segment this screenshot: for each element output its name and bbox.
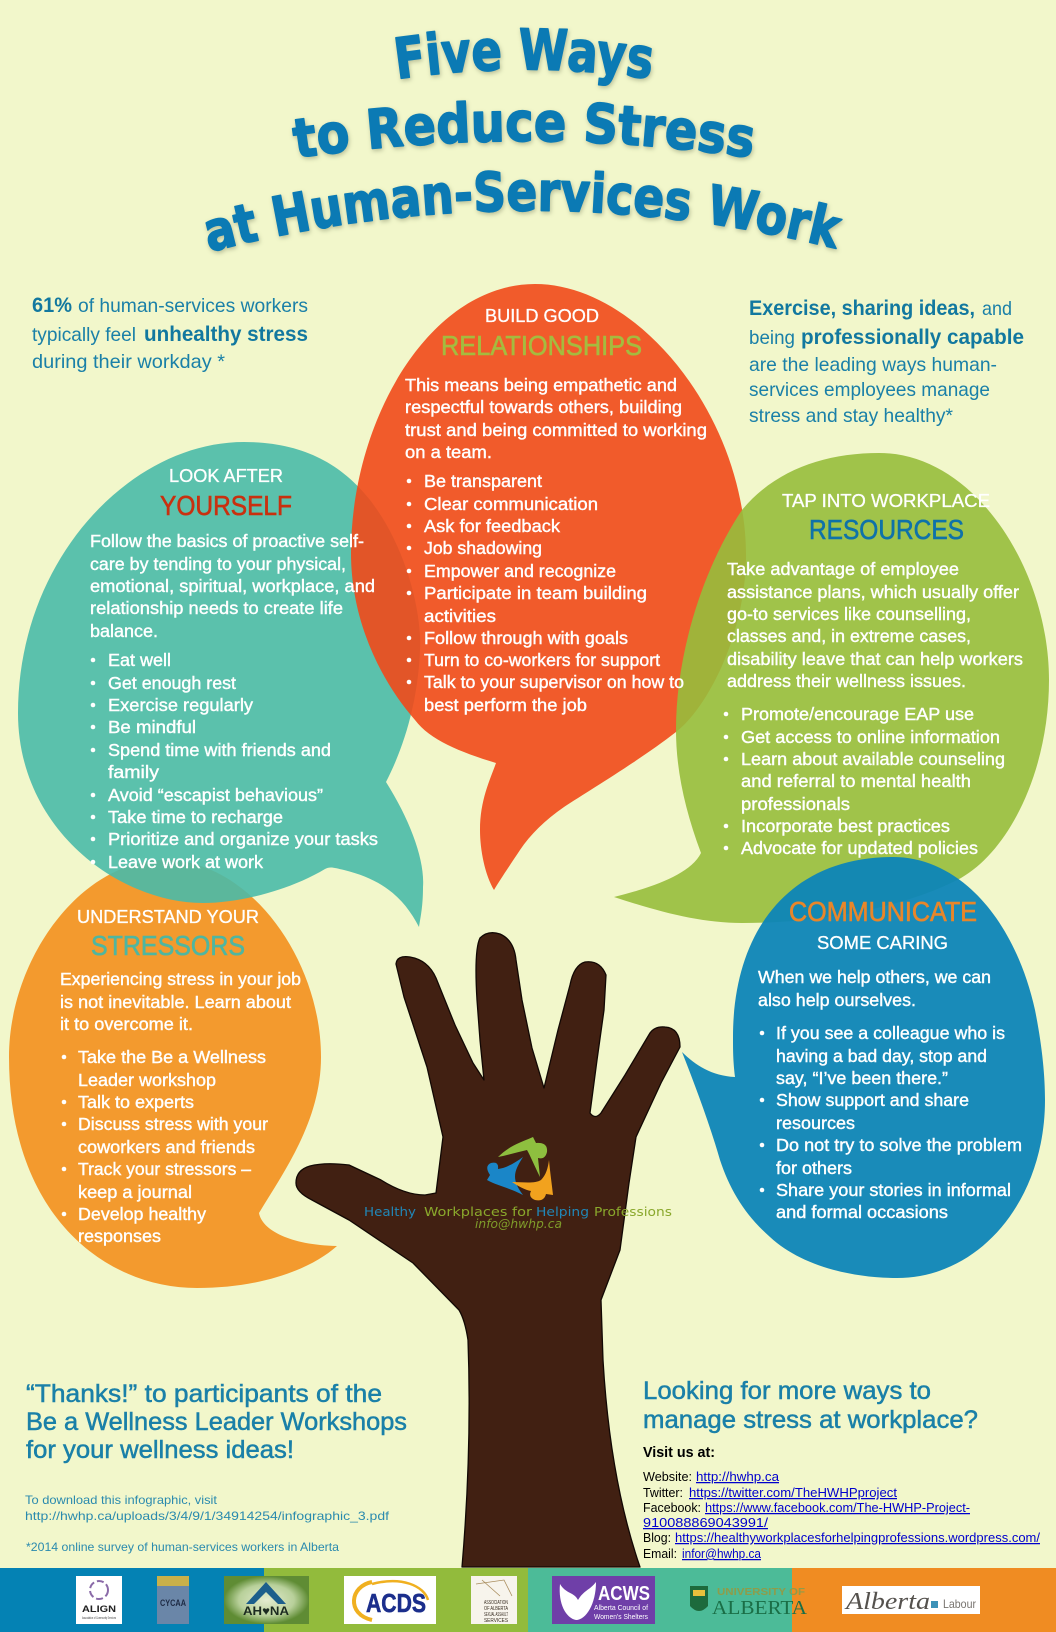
icon: raised hand [296, 933, 680, 1567]
panel text: build good relationships: Ask for feedback [424, 516, 560, 536]
logo: AHNA: AH♥NA [243, 1604, 289, 1618]
stat: leading ways to manage stress [749, 297, 1024, 427]
panel text: build good relationships: Empower and recognize [424, 561, 616, 581]
panel text: understand your stressors: UNDERSTAND YOUR [77, 906, 259, 927]
panel text: communicate some caring: and formal occasions [776, 1202, 948, 1222]
panel text: tap into workplace resources: assistance plans, which usually offer [727, 582, 1019, 602]
logo: association of Alberta sexual assault services [471, 1576, 517, 1624]
panel text: understand your stressors: Track your stressors – [78, 1159, 251, 1179]
panel text: look after yourself [90, 465, 378, 872]
contact links [643, 1444, 1041, 1561]
panel text: tap into workplace resources: Learn about available counseling [741, 749, 1005, 769]
panel text: tap into workplace resources: go-to services like counselling, [727, 604, 971, 624]
thanks message [26, 1380, 407, 1464]
panel text: tap into workplace resources: address their wellness issues. [727, 671, 966, 691]
logo: ACDS: ACDS [366, 1588, 426, 1618]
stat: leading ways to manage stress: and [982, 298, 1012, 320]
panel text: communicate some caring: If you see a colleague who is [776, 1023, 1005, 1043]
panel text: look after yourself: care by tending to your physical, [90, 554, 346, 574]
panel text: communicate some caring: Share your stories in informal [776, 1180, 1011, 1200]
logo: ACWS: ACWS [598, 1583, 650, 1605]
logo: ALIGN: Association of Community Services [82, 1615, 116, 1620]
panel text: build good relationships: BUILD GOOD [485, 305, 599, 326]
bubble: understand your stressors (orange) [9, 860, 337, 1288]
stat: leading ways to manage stress: services employees manage [749, 379, 990, 401]
panel text: build good relationships: Be transparent [424, 471, 542, 491]
title: Five Ways [394, 28, 655, 90]
panel text: build good relationships: Turn to co-workers for support [424, 650, 660, 670]
logo: association of Alberta sexual assault services: SERVICES [484, 1618, 509, 1624]
contact links: Facebook: [643, 1501, 701, 1515]
bubble: build good relationships (red) [351, 284, 746, 890]
logo text: Healthy Workplaces for Helping Professions: info@hwhp.ca [475, 1216, 562, 1231]
panel text: build good relationships [405, 305, 707, 715]
contact links: Visit us at: [643, 1444, 715, 1461]
download note [25, 1493, 390, 1523]
panel text: look after yourself: Exercise regularly [108, 695, 253, 715]
panel text: communicate some caring: Do not try to solve the problem [776, 1135, 1022, 1155]
panel text: understand your stressors: it to overcome it. [60, 1014, 193, 1034]
more ways heading [643, 1377, 978, 1434]
panel text: communicate some caring: say, “I’ve been there.” [776, 1068, 948, 1088]
logo: ACWS [552, 1576, 655, 1624]
logo: association of Alberta sexual assault services: ASSOCIATION [484, 1600, 508, 1606]
logo: ALIGN [76, 1576, 122, 1624]
contact links: https://twitter.com/TheHWHPproject [689, 1486, 898, 1500]
logo: Alberta Labour: Labour [943, 1597, 976, 1611]
panel text: build good relationships: Talk to your supervisor on how to [424, 672, 684, 692]
logo: ACWS: Alberta Council of [594, 1603, 649, 1612]
panel text: look after yourself: YOURSELF [160, 490, 292, 521]
logo text: Healthy Workplaces for Helping Professions: Professions [594, 1204, 672, 1219]
logo: University of Alberta: UNIVERSITY OF [717, 1587, 805, 1598]
logo text: Healthy Workplaces for Helping Professions: Healthy [364, 1204, 417, 1219]
logo: ACDS [344, 1576, 436, 1624]
contact links: http://hwhp.ca [696, 1470, 779, 1484]
panel text: understand your stressors: responses [78, 1226, 161, 1246]
stat: leading ways to manage stress: professionally capable [801, 326, 1024, 349]
stat: 61 percent: 61% [32, 294, 72, 317]
more ways heading: manage stress at workplace? [643, 1406, 978, 1434]
panel text: look after yourself: Follow the basics of proactive self- [90, 531, 364, 551]
stat: leading ways to manage stress: are the leading ways human- [749, 354, 997, 376]
panel text: understand your stressors: Experiencing stress in your job [60, 969, 301, 989]
panel text: understand your stressors [60, 906, 301, 1246]
panel text: look after yourself: Spend time with friends and [108, 740, 331, 760]
panel text: communicate some caring: SOME CARING [817, 932, 948, 953]
stat: 61 percent: during their workday * [32, 351, 225, 373]
panel text: tap into workplace resources: Promote/encourage EAP use [741, 704, 974, 724]
logo: association of Alberta sexual assault services: SEXUAL ASSAULT [484, 1612, 508, 1618]
panel text: understand your stressors: Develop healthy [78, 1204, 206, 1224]
panel text: look after yourself: Prioritize and organize your tasks [108, 829, 378, 849]
stat: 61 percent: typically feel [32, 324, 136, 346]
footer colour bar [0, 1568, 1056, 1632]
logo text: Healthy Workplaces for Helping Professions: Workplaces for [424, 1204, 533, 1219]
contact links: Website: [643, 1470, 692, 1484]
logo: CYCAA [157, 1576, 189, 1624]
title [204, 28, 844, 255]
contact links: infor@hwhp.ca [682, 1547, 761, 1561]
stat: 61 percent: of human-services workers [78, 295, 308, 317]
logo: CYCAA: CYCAA [160, 1598, 186, 1608]
contact links: https://www.facebook.com/The-HWHP-Project- [705, 1501, 970, 1515]
thanks message: “Thanks!” to participants of the [26, 1380, 382, 1408]
panel text: build good relationships: activities [424, 606, 496, 626]
panel text: understand your stressors: Leader workshop [78, 1070, 216, 1090]
contact links: 910088869043991/ [643, 1516, 769, 1530]
panel text: build good relationships: Follow through with goals [424, 628, 628, 648]
panel text: communicate some caring: When we help others, we can [758, 967, 991, 987]
stat: 61 percent [32, 294, 308, 373]
panel text: communicate some caring: resources [776, 1113, 855, 1133]
panel text: look after yourself: Get enough rest [108, 673, 236, 693]
panel text: tap into workplace resources: Get access to online information [741, 727, 1000, 747]
panel text: tap into workplace resources: disability leave that can help workers [727, 649, 1023, 669]
logo: ALIGN: ALIGN [82, 1604, 116, 1614]
panel text: look after yourself: Avoid “escapist behavious” [108, 785, 323, 805]
logo: University of Alberta: ALBERTA [712, 1597, 808, 1619]
panel text: build good relationships: RELATIONSHIPS [441, 330, 642, 361]
survey footnote: *2014 online survey of human-services workers in Alberta [26, 1540, 339, 1554]
logo: Alberta Labour [842, 1586, 980, 1615]
bubble: communicate some caring (blue) [682, 857, 1045, 1278]
panel text: understand your stressors: Take the Be a Wellness [78, 1047, 266, 1067]
stat: leading ways to manage stress: being [749, 327, 795, 349]
title: to Reduce Stress [291, 100, 756, 162]
panel text: understand your stressors: Discuss stress with your [78, 1114, 268, 1134]
panel text: build good relationships: Clear communication [424, 494, 598, 514]
panel text: look after yourself: Eat well [108, 650, 171, 670]
panel text: look after yourself: relationship needs to create life [90, 598, 343, 618]
panel text: communicate some caring: COMMUNICATE [789, 896, 977, 927]
panel text: look after yourself: LOOK AFTER [169, 465, 283, 486]
title: at Human-Services Work [204, 170, 844, 255]
bubble: look after yourself (teal) [18, 442, 423, 927]
thanks message: Be a Wellness Leader Workshops [26, 1408, 407, 1436]
panel text: tap into workplace resources: Advocate for updated policies [741, 838, 978, 858]
logo: association of Alberta sexual assault services: OF ALBERTA [484, 1606, 509, 1612]
logo: Alberta Labour: Alberta [844, 1589, 930, 1615]
stat: 61 percent: unhealthy stress [144, 323, 308, 346]
more ways heading: Looking for more ways to [643, 1377, 931, 1405]
download note: To download this infographic, visit [25, 1493, 218, 1507]
panel text: look after yourself: Be mindful [108, 717, 196, 737]
logo text: Healthy Workplaces for Helping Professions: Helping [536, 1204, 589, 1219]
panel text: build good relationships: on a team. [405, 442, 492, 462]
panel text: build good relationships: This means being empathetic and [405, 375, 677, 395]
stat: leading ways to manage stress: stress and stay healthy* [749, 405, 953, 427]
contact links: Blog: [643, 1531, 671, 1545]
panel text: look after yourself: emotional, spiritual, workplace, and [90, 576, 375, 596]
panel text: tap into workplace resources: classes and, in extreme cases, [727, 626, 971, 646]
panel text: tap into workplace resources: TAP INTO WORKPLACE [782, 490, 990, 511]
panel text: tap into workplace resources: Take advantage of employee [727, 559, 959, 579]
logo: AHNA [224, 1576, 309, 1624]
panel text: tap into workplace resources: and referral to mental health [741, 771, 971, 791]
contact links: Twitter: [643, 1486, 683, 1500]
panel text: tap into workplace resources: professionals [741, 794, 850, 814]
panel text: build good relationships: best perform the job [424, 695, 587, 715]
panel text: tap into workplace resources: Incorporate best practices [741, 816, 950, 836]
panel text: look after yourself: Leave work at work [108, 852, 263, 872]
panel text: understand your stressors: keep a journal [78, 1182, 192, 1202]
panel text: communicate some caring: also help ourselves. [758, 990, 916, 1010]
panel text: communicate some caring: for others [776, 1158, 852, 1178]
panel text: tap into workplace resources [724, 490, 1023, 858]
panel text: communicate some caring [758, 896, 1022, 1222]
panel text: understand your stressors: STRESSORS [91, 930, 245, 961]
logo: ACWS: Women’s Shelters [594, 1612, 648, 1621]
panel text: communicate some caring: having a bad day, stop and [776, 1046, 987, 1066]
logo: three figures [487, 1137, 553, 1200]
panel text: build good relationships: Job shadowing [424, 538, 542, 558]
contact links: Email: [643, 1547, 677, 1561]
panel text: look after yourself: balance. [90, 621, 158, 641]
panel text: build good relationships: trust and being committed to working [405, 420, 707, 440]
panel text: look after yourself: Take time to recharge [108, 807, 283, 827]
panel text: build good relationships: Participate in team building [424, 583, 647, 603]
contact links: https://healthyworkplacesforhelpingprofessions.wordpress.com/ [675, 1531, 1041, 1545]
thanks message: for your wellness ideas! [26, 1436, 294, 1464]
bubble: tap into workplace resources (green) [614, 453, 1049, 923]
stat: leading ways to manage stress: Exercise, sharing ideas, [749, 297, 975, 320]
logo: University of Alberta [690, 1586, 808, 1619]
panel text: build good relationships: respectful towards others, building [405, 397, 682, 417]
download note: http://hwhp.ca/uploads/3/4/9/1/34914254/infographic_3.pdf [25, 1509, 390, 1523]
panel text: understand your stressors: is not inevitable. Learn about [60, 992, 291, 1012]
logo text: Healthy Workplaces for Helping Professions [364, 1204, 672, 1231]
panel text: look after yourself: family [108, 762, 159, 782]
panel text: understand your stressors: coworkers and friends [78, 1137, 255, 1157]
panel text: communicate some caring: Show support and share [776, 1090, 969, 1110]
panel text: understand your stressors: Talk to experts [78, 1092, 194, 1112]
panel text: tap into workplace resources: RESOURCES [809, 514, 964, 545]
